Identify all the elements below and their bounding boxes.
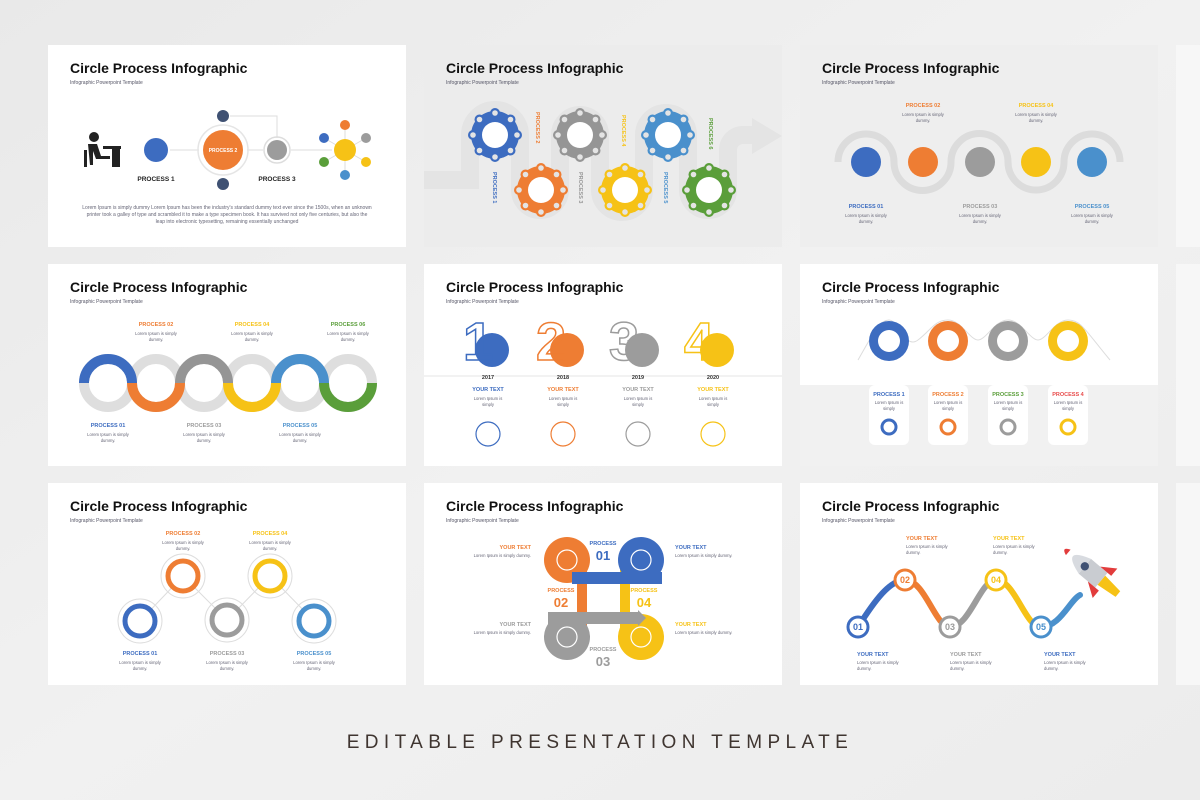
partial cards at right edge: [1176, 45, 1200, 685]
card 6: tabs: PROCESS 1: [873, 392, 905, 398]
card 4: chain rings: Lorem Ipsum is simply: [327, 331, 370, 336]
card 8: interlocking loops: [424, 483, 782, 685]
card 8: interlocking loops: 04: [637, 595, 652, 610]
card 6: tabs: Lorem Ipsum is: [1054, 400, 1082, 405]
card 5: numbered years: 2020: [707, 375, 719, 381]
card 5: numbered years: 4: [684, 312, 714, 372]
card 9: rocket wave: YOUR TEXT: [1044, 652, 1076, 658]
card 5: numbered years: 2: [536, 312, 566, 372]
card 8: interlocking loops: Lorem Ipsum is simply dummy.: [675, 553, 732, 558]
card 6: tabs: Infographic Powerpoint Template: [822, 299, 895, 305]
card 7: zigzag circles: Infographic Powerpoint Template: [70, 518, 143, 524]
card 7: zigzag circles: Lorem Ipsum is simply: [162, 540, 205, 545]
card 8: interlocking loops: PROCESS: [590, 647, 617, 653]
card 1: hub process: Infographic Powerpoint Template: [70, 80, 143, 86]
card 4: chain rings: PROCESS 02: [139, 322, 173, 328]
card 9: rocket wave: Lorem Ipsum is simply: [906, 544, 949, 549]
card 4: chain rings: Lorem Ipsum is simply: [279, 432, 322, 437]
card 9: rocket wave: Infographic Powerpoint Template: [822, 518, 895, 524]
card 7: zigzag circles: PROCESS 02: [166, 531, 200, 537]
footer caption: EDITABLE PRESENTATION TEMPLATE: [347, 732, 853, 753]
card 8: interlocking loops: YOUR TEXT: [675, 622, 707, 628]
rotated labels: [491, 112, 713, 203]
card 4: chain rings: Lorem Ipsum is simply: [231, 331, 274, 336]
card 4: chain rings: Lorem Ipsum is simply: [183, 432, 226, 437]
card 3: arc path: Lorem Ipsum is simply: [959, 213, 1002, 218]
card 6: tabs: Lorem Ipsum is: [994, 400, 1022, 405]
card 4: chain rings: PROCESS 05: [283, 423, 317, 429]
card 7: zigzag circles: PROCESS 05: [297, 651, 331, 657]
card 9: rocket wave: Lorem Ipsum is simply: [950, 660, 993, 665]
card 5: numbered years: Circle Process Infographic: [446, 279, 624, 295]
card 9: rocket wave: dummy.: [993, 550, 1008, 555]
card 3: arc path: Lorem Ipsum is simply: [902, 112, 945, 117]
card 4: chain rings: Lorem Ipsum is simply: [87, 432, 130, 437]
card 5: numbered years: simply: [557, 402, 570, 407]
title: Circle Process Infographic: [70, 60, 248, 76]
card 6: tabs: simply: [942, 406, 955, 411]
card 8: interlocking loops: Lorem Ipsum is simply dummy.: [474, 630, 531, 635]
card 3: arc path: Lorem Ipsum is simply: [1015, 112, 1058, 117]
card 4: chain rings: PROCESS 03: [187, 423, 221, 429]
card 7: zigzag circles: dummy.: [263, 546, 277, 551]
card 3: arc path: dummy.: [1085, 219, 1099, 224]
card 4: chain rings: Circle Process Infographic: [70, 279, 248, 295]
card 9: rocket wave: Lorem Ipsum is simply: [1044, 660, 1087, 665]
card 8: interlocking loops: 01: [596, 548, 610, 563]
card 3: arc path: PROCESS 03: [963, 204, 997, 210]
rotated labels: PROCESS 3: [577, 172, 583, 203]
rotated labels: PROCESS 2: [534, 112, 540, 143]
card 9: rocket wave: Lorem Ipsum is simply: [993, 544, 1036, 549]
paragraph: [82, 205, 372, 225]
card 6: tabs: PROCESS 4: [1052, 392, 1085, 398]
card 5: numbered years: 2017: [482, 375, 494, 381]
card 6: tabs: PROCESS 2: [932, 392, 964, 398]
card 9: rocket wave: dummy.: [1044, 666, 1059, 671]
card 9: rocket wave: Lorem Ipsum is simply: [857, 660, 900, 665]
card 8: interlocking loops: PROCESS: [548, 588, 575, 594]
icon: rocket: [1052, 535, 1130, 609]
card 2: gears: [424, 45, 782, 247]
rotated labels: PROCESS 6: [707, 118, 713, 149]
card 4: chain rings: dummy.: [341, 337, 355, 342]
card 8: interlocking loops: Circle Process Infographic: [446, 498, 624, 514]
card 5: numbered years: YOUR TEXT: [622, 387, 654, 393]
card 3: arc path: dummy.: [916, 118, 930, 123]
process 3: [264, 137, 290, 163]
card 6: tabs: PROCESS 3: [992, 392, 1024, 398]
card 4: chain rings: Infographic Powerpoint Template: [70, 299, 143, 305]
card 3: arc path: PROCESS 04: [1019, 103, 1054, 109]
card 5: numbered years: YOUR TEXT: [547, 387, 579, 393]
card 4: chain rings: PROCESS 04: [235, 322, 270, 328]
card 7: zigzag circles: Lorem Ipsum is simply: [249, 540, 292, 545]
card 7: zigzag circles: PROCESS 04: [253, 531, 288, 537]
card 7: zigzag circles: Lorem Ipsum is simply: [206, 660, 249, 665]
card 6: tabs: Circle Process Infographic: [822, 279, 1000, 295]
paragraph: printer took a galley of type and scrambled it to make a type specimen book. It has survived not only five centuries, but also the: [87, 212, 368, 218]
card 9: rocket wave: 03: [945, 622, 955, 632]
card 6: tabs: simply: [1002, 406, 1015, 411]
card 3: arc path: Lorem Ipsum is simply: [1071, 213, 1114, 218]
card 5: numbered years: Lorem Ipsum is: [624, 396, 652, 401]
card 3: arc path: PROCESS 01: [849, 204, 883, 210]
paragraph: leap into electronic typesetting, remaining essentially unchanged: [156, 219, 299, 225]
card 3: arc path: dummy.: [1029, 118, 1043, 123]
card 9: rocket wave: 02: [900, 575, 910, 585]
card 4: chain rings: dummy.: [245, 337, 259, 342]
card 7: zigzag circles: Lorem Ipsum is simply: [119, 660, 162, 665]
card 9: rocket wave: 01: [853, 622, 863, 632]
card 4: chain rings: dummy.: [101, 438, 115, 443]
process 4 cluster: [324, 125, 366, 175]
rotated labels: PROCESS 5: [662, 172, 668, 203]
card 5: numbered years: simply: [632, 402, 645, 407]
card 6: tabs: simply: [1062, 406, 1075, 411]
card 9: rocket wave: YOUR TEXT: [950, 652, 982, 658]
card 8: interlocking loops: YOUR TEXT: [500, 545, 532, 551]
connectors: [170, 116, 332, 150]
card 5: numbered years: Lorem Ipsum is: [474, 396, 502, 401]
card 3: arc path: [800, 45, 1158, 247]
card 1: hub process: [48, 45, 406, 247]
card 1: hub process: PROCESS 1: [137, 176, 175, 183]
card 7: zigzag circles: Lorem Ipsum is simply: [293, 660, 336, 665]
card 9: rocket wave: dummy.: [950, 666, 965, 671]
card 4: chain rings: dummy.: [293, 438, 307, 443]
paragraph: Lorem Ipsum is simply dummy Lorem Ipsum has been the industry's standard dummy text ever since the 1500s, when an unknown: [82, 205, 372, 211]
card 7: zigzag circles: dummy.: [176, 546, 190, 551]
card 8: interlocking loops: Infographic Powerpoint Template: [446, 518, 519, 524]
card 4: chain rings: Lorem Ipsum is simply: [135, 331, 178, 336]
card 5: numbered years: YOUR TEXT: [472, 387, 504, 393]
card 4: chain rings: dummy.: [149, 337, 163, 342]
card 7: zigzag circles: [48, 483, 406, 685]
card 3: arc path: PROCESS 05: [1075, 204, 1109, 210]
card 9: rocket wave: 04: [991, 575, 1001, 585]
card 8: interlocking loops: PROCESS: [590, 541, 617, 547]
card 9: rocket wave: 05: [1036, 622, 1046, 632]
card 5: numbered years: 1: [463, 312, 493, 372]
process 2: [198, 125, 248, 175]
card 5: numbered years: 2018: [557, 375, 569, 381]
card 1: hub process: PROCESS 3: [258, 176, 296, 183]
card 4: chain rings: PROCESS 06: [331, 322, 365, 328]
card 9: rocket wave: dummy.: [906, 550, 921, 555]
card 7: zigzag circles: PROCESS 01: [123, 651, 157, 657]
card 9: rocket wave: YOUR TEXT: [906, 536, 938, 542]
card 5: numbered years: 3: [609, 312, 639, 372]
card 1: hub process: PROCESS 2: [209, 148, 238, 154]
wave arrow: [424, 110, 755, 212]
card 4: chain rings: PROCESS 01: [91, 423, 125, 429]
card 3: arc path: dummy.: [859, 219, 873, 224]
card 5: numbered years: simply: [482, 402, 495, 407]
card 6: tabs: Lorem Ipsum is: [875, 400, 903, 405]
card 5: numbered years: Infographic Powerpoint Template: [446, 299, 519, 305]
card 2: gears: Circle Process Infographic: [446, 60, 624, 76]
card 7: zigzag circles: dummy.: [133, 666, 147, 671]
card 5: numbered years: 2019: [632, 375, 644, 381]
card 3: arc path: Infographic Powerpoint Template: [822, 80, 895, 86]
card 3: arc path: Lorem Ipsum is simply: [845, 213, 888, 218]
card 7: zigzag circles: Circle Process Infographic: [70, 498, 248, 514]
card 2: gears: Infographic Powerpoint Template: [446, 80, 519, 86]
card 9: rocket wave: [800, 483, 1158, 685]
card 8: interlocking loops: PROCESS: [631, 588, 658, 594]
card 9: rocket wave: Circle Process Infographic: [822, 498, 1000, 514]
card 8: interlocking loops: 02: [554, 595, 568, 610]
card 3: arc path: dummy.: [973, 219, 987, 224]
card 9: rocket wave: dummy.: [857, 666, 872, 671]
card 8: interlocking loops: Lorem Ipsum is simply dummy.: [474, 553, 531, 558]
card 6: tabs: Lorem Ipsum is: [934, 400, 962, 405]
card 6: tabs: [800, 264, 1158, 466]
card 4: chain rings: [48, 264, 406, 466]
process 1: [144, 138, 168, 162]
card 5: numbered years: simply: [707, 402, 720, 407]
icon: person at desk: [84, 132, 121, 167]
rotated labels: PROCESS 4: [620, 115, 626, 147]
card 3: arc path: Circle Process Infographic: [822, 60, 1000, 76]
card 9: rocket wave: YOUR TEXT: [993, 536, 1025, 542]
card 6: tabs: simply: [883, 406, 896, 411]
card 8: interlocking loops: 03: [596, 654, 610, 669]
card 3: arc path: PROCESS 02: [906, 103, 940, 109]
card 5: numbered years: Lorem Ipsum is: [699, 396, 727, 401]
card 4: chain rings: dummy.: [197, 438, 211, 443]
rotated labels: PROCESS 1: [491, 172, 497, 203]
card 8: interlocking loops: YOUR TEXT: [675, 545, 707, 551]
card 5: numbered years: YOUR TEXT: [697, 387, 729, 393]
card 8: interlocking loops: YOUR TEXT: [500, 622, 532, 628]
card 9: rocket wave: YOUR TEXT: [857, 652, 889, 658]
card 5: numbered years: [424, 264, 782, 466]
card 5: numbered years: Lorem Ipsum is: [549, 396, 577, 401]
card 7: zigzag circles: dummy.: [307, 666, 321, 671]
card 7: zigzag circles: PROCESS 03: [210, 651, 244, 657]
card 7: zigzag circles: dummy.: [220, 666, 234, 671]
gears: [468, 108, 522, 162]
card 8: interlocking loops: Lorem Ipsum is simply dummy.: [675, 630, 732, 635]
